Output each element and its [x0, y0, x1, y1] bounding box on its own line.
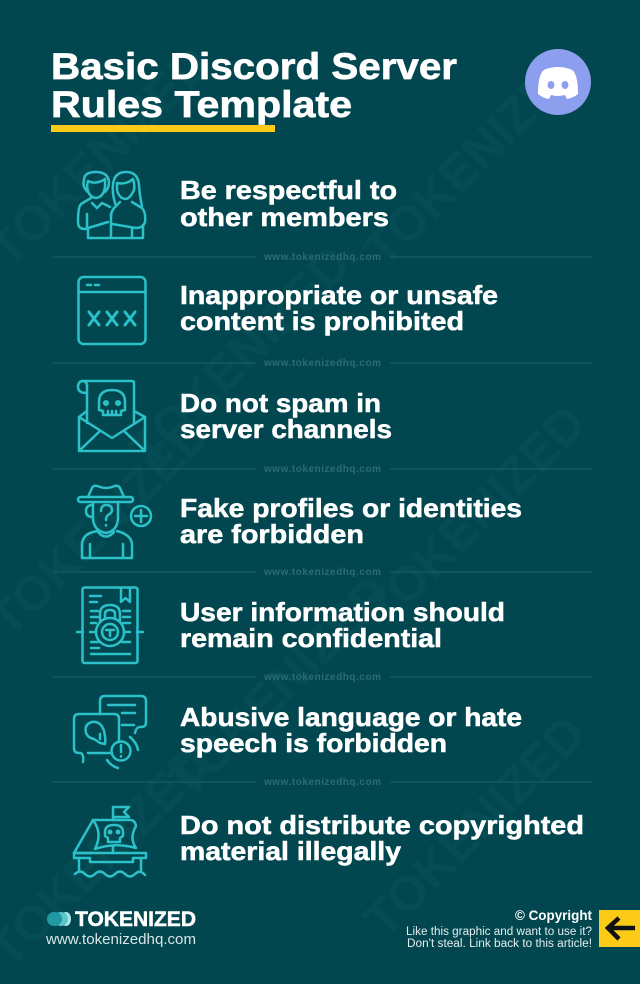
rule 3 text: Do not spam in	[180, 388, 381, 418]
icon: yellow arrow box	[599, 910, 640, 947]
rule 4 text	[180, 493, 522, 549]
rule 4 text: Fake profiles or identities	[180, 493, 522, 523]
rule 6 text	[180, 702, 522, 758]
rule 7 text: Do not distribute copyrighted	[180, 810, 584, 840]
rule 6 text: speech is forbidden	[180, 728, 447, 758]
icon: envelope with skull letter	[78, 381, 145, 451]
copyright notice: © Copyright	[515, 908, 592, 923]
text: TOKENIZED	[353, 395, 596, 638]
divider 1 with watermark: www.tokenizedhq.com	[263, 252, 381, 263]
rule 5 text: User information should	[180, 597, 505, 627]
rule 3 text	[180, 388, 392, 444]
copyright notice: Don't steal. Link back to this article!	[407, 938, 592, 950]
icon: discord logo	[525, 49, 591, 115]
rule 5 text: remain confidential	[180, 623, 442, 653]
text: TOKENIZED	[353, 35, 596, 278]
rule 1 text: Be respectful to	[180, 175, 397, 205]
rule 7 text	[180, 810, 584, 866]
divider 3 with watermark: www.tokenizedhq.com	[263, 464, 381, 475]
text: TOKENIZED	[158, 565, 401, 808]
rule 7 text: material illegally	[180, 836, 402, 866]
text: TOKENIZED	[353, 705, 596, 948]
icon: speech bubbles with warning	[74, 696, 146, 768]
title	[51, 46, 457, 125]
icon: two people with crossed arms	[78, 172, 145, 238]
copyright notice	[406, 908, 592, 950]
divider 6 with watermark: www.tokenizedhq.com	[263, 777, 381, 788]
divider 5 with watermark: www.tokenizedhq.com	[263, 672, 381, 683]
footer website url: www.tokenizedhq.com	[45, 932, 196, 948]
title underline	[51, 125, 275, 132]
rule 2 text: Inappropriate or unsafe	[180, 280, 498, 310]
icon: anonymous person with hat	[78, 486, 151, 558]
icon: pirate ship	[74, 807, 146, 876]
rule 4 text: are forbidden	[180, 519, 364, 549]
rule 3 text: server channels	[180, 414, 392, 444]
footer logo: TOKENIZED	[75, 908, 196, 931]
rule 2 text: content is prohibited	[180, 306, 464, 336]
icon: document with padlock	[77, 588, 143, 663]
title: Basic Discord Server	[51, 46, 457, 87]
text: TOKENIZED	[118, 235, 361, 478]
divider 2 with watermark: www.tokenizedhq.com	[263, 358, 381, 369]
rule 1 text	[180, 175, 397, 232]
rule 6 text: Abusive language or hate	[180, 702, 522, 732]
icon: browser window with xxx	[78, 277, 146, 344]
rule 5 text	[180, 597, 505, 653]
rule 2 text	[180, 280, 498, 336]
copyright notice: Like this graphic and want to use it?	[406, 926, 592, 938]
title: Rules Template	[51, 84, 352, 125]
rule 1 text: other members	[180, 202, 389, 232]
divider 4 with watermark: www.tokenizedhq.com	[263, 567, 381, 578]
